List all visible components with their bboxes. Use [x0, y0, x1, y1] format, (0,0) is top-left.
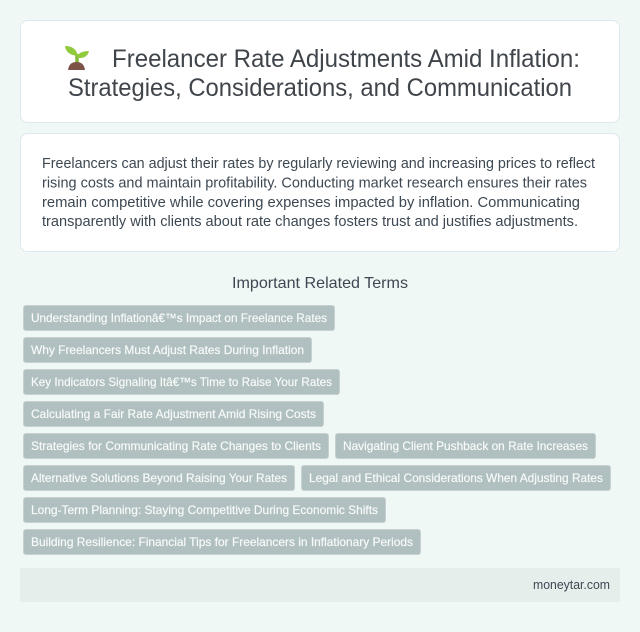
chip: key indicators: Key Indicators Signaling Itâ€™s Time to Raise Your Rates	[31, 375, 332, 389]
chip: communicating	[24, 434, 328, 458]
panel: summary text: remain competitive while covering expenses impacted by inflation. Communicating	[42, 194, 580, 211]
chip: legal: Legal and Ethical Considerations When Adjusting Rates	[309, 471, 603, 485]
title: Freelancer Rate Adjustments Amid Inflation:	[112, 45, 580, 73]
chip: long-term	[24, 498, 386, 522]
chip: why adjust: Why Freelancers Must Adjust Rates During Inflation	[31, 343, 304, 357]
chip: why adjust	[24, 338, 312, 362]
chip: legal	[302, 466, 610, 490]
chip: pushback	[336, 434, 596, 458]
footer	[20, 568, 620, 602]
panel: summary text: rising costs and maintain profitability. Conducting market research ensures their rates	[42, 174, 587, 192]
icon: seedling	[65, 46, 89, 70]
panel: title card	[20, 20, 620, 122]
chip: pushback: Navigating Client Pushback on Rate Increases	[343, 439, 588, 453]
panel: summary text: transparently with clients about rate changes fosters trust and justifies adjustments.	[42, 213, 578, 230]
chip: key indicators	[24, 370, 340, 394]
footer: moneytar.com	[533, 577, 610, 592]
chip: fair rate	[24, 402, 324, 426]
chip: resilience: Building Resilience: Financial Tips for Freelancers in Inflationary Periods	[31, 535, 413, 549]
chip: alternatives	[24, 466, 294, 490]
chip: long-term: Long-Term Planning: Staying Competitive During Economic Shifts	[31, 503, 378, 517]
chip: fair rate: Calculating a Fair Rate Adjustment Amid Rising Costs	[31, 407, 316, 421]
chip: understanding inflation	[24, 306, 334, 330]
title	[68, 45, 580, 102]
chip: communicating: Strategies for Communicating Rate Changes to Clients	[31, 439, 321, 453]
chip: understanding inflation: Understanding Inflationâ€™s Impact on Freelance Rates	[31, 311, 327, 325]
panel: summary text	[20, 134, 620, 252]
chip: alternatives: Alternative Solutions Beyond Raising Your Rates	[31, 471, 287, 485]
panel: summary text: Freelancers can adjust their rates by regularly reviewing and increasing prices to reflect	[42, 155, 596, 172]
chip: resilience	[24, 530, 420, 554]
heading: related terms: Important Related Terms	[232, 275, 408, 292]
title: Strategies, Considerations, and Communication	[68, 74, 572, 102]
